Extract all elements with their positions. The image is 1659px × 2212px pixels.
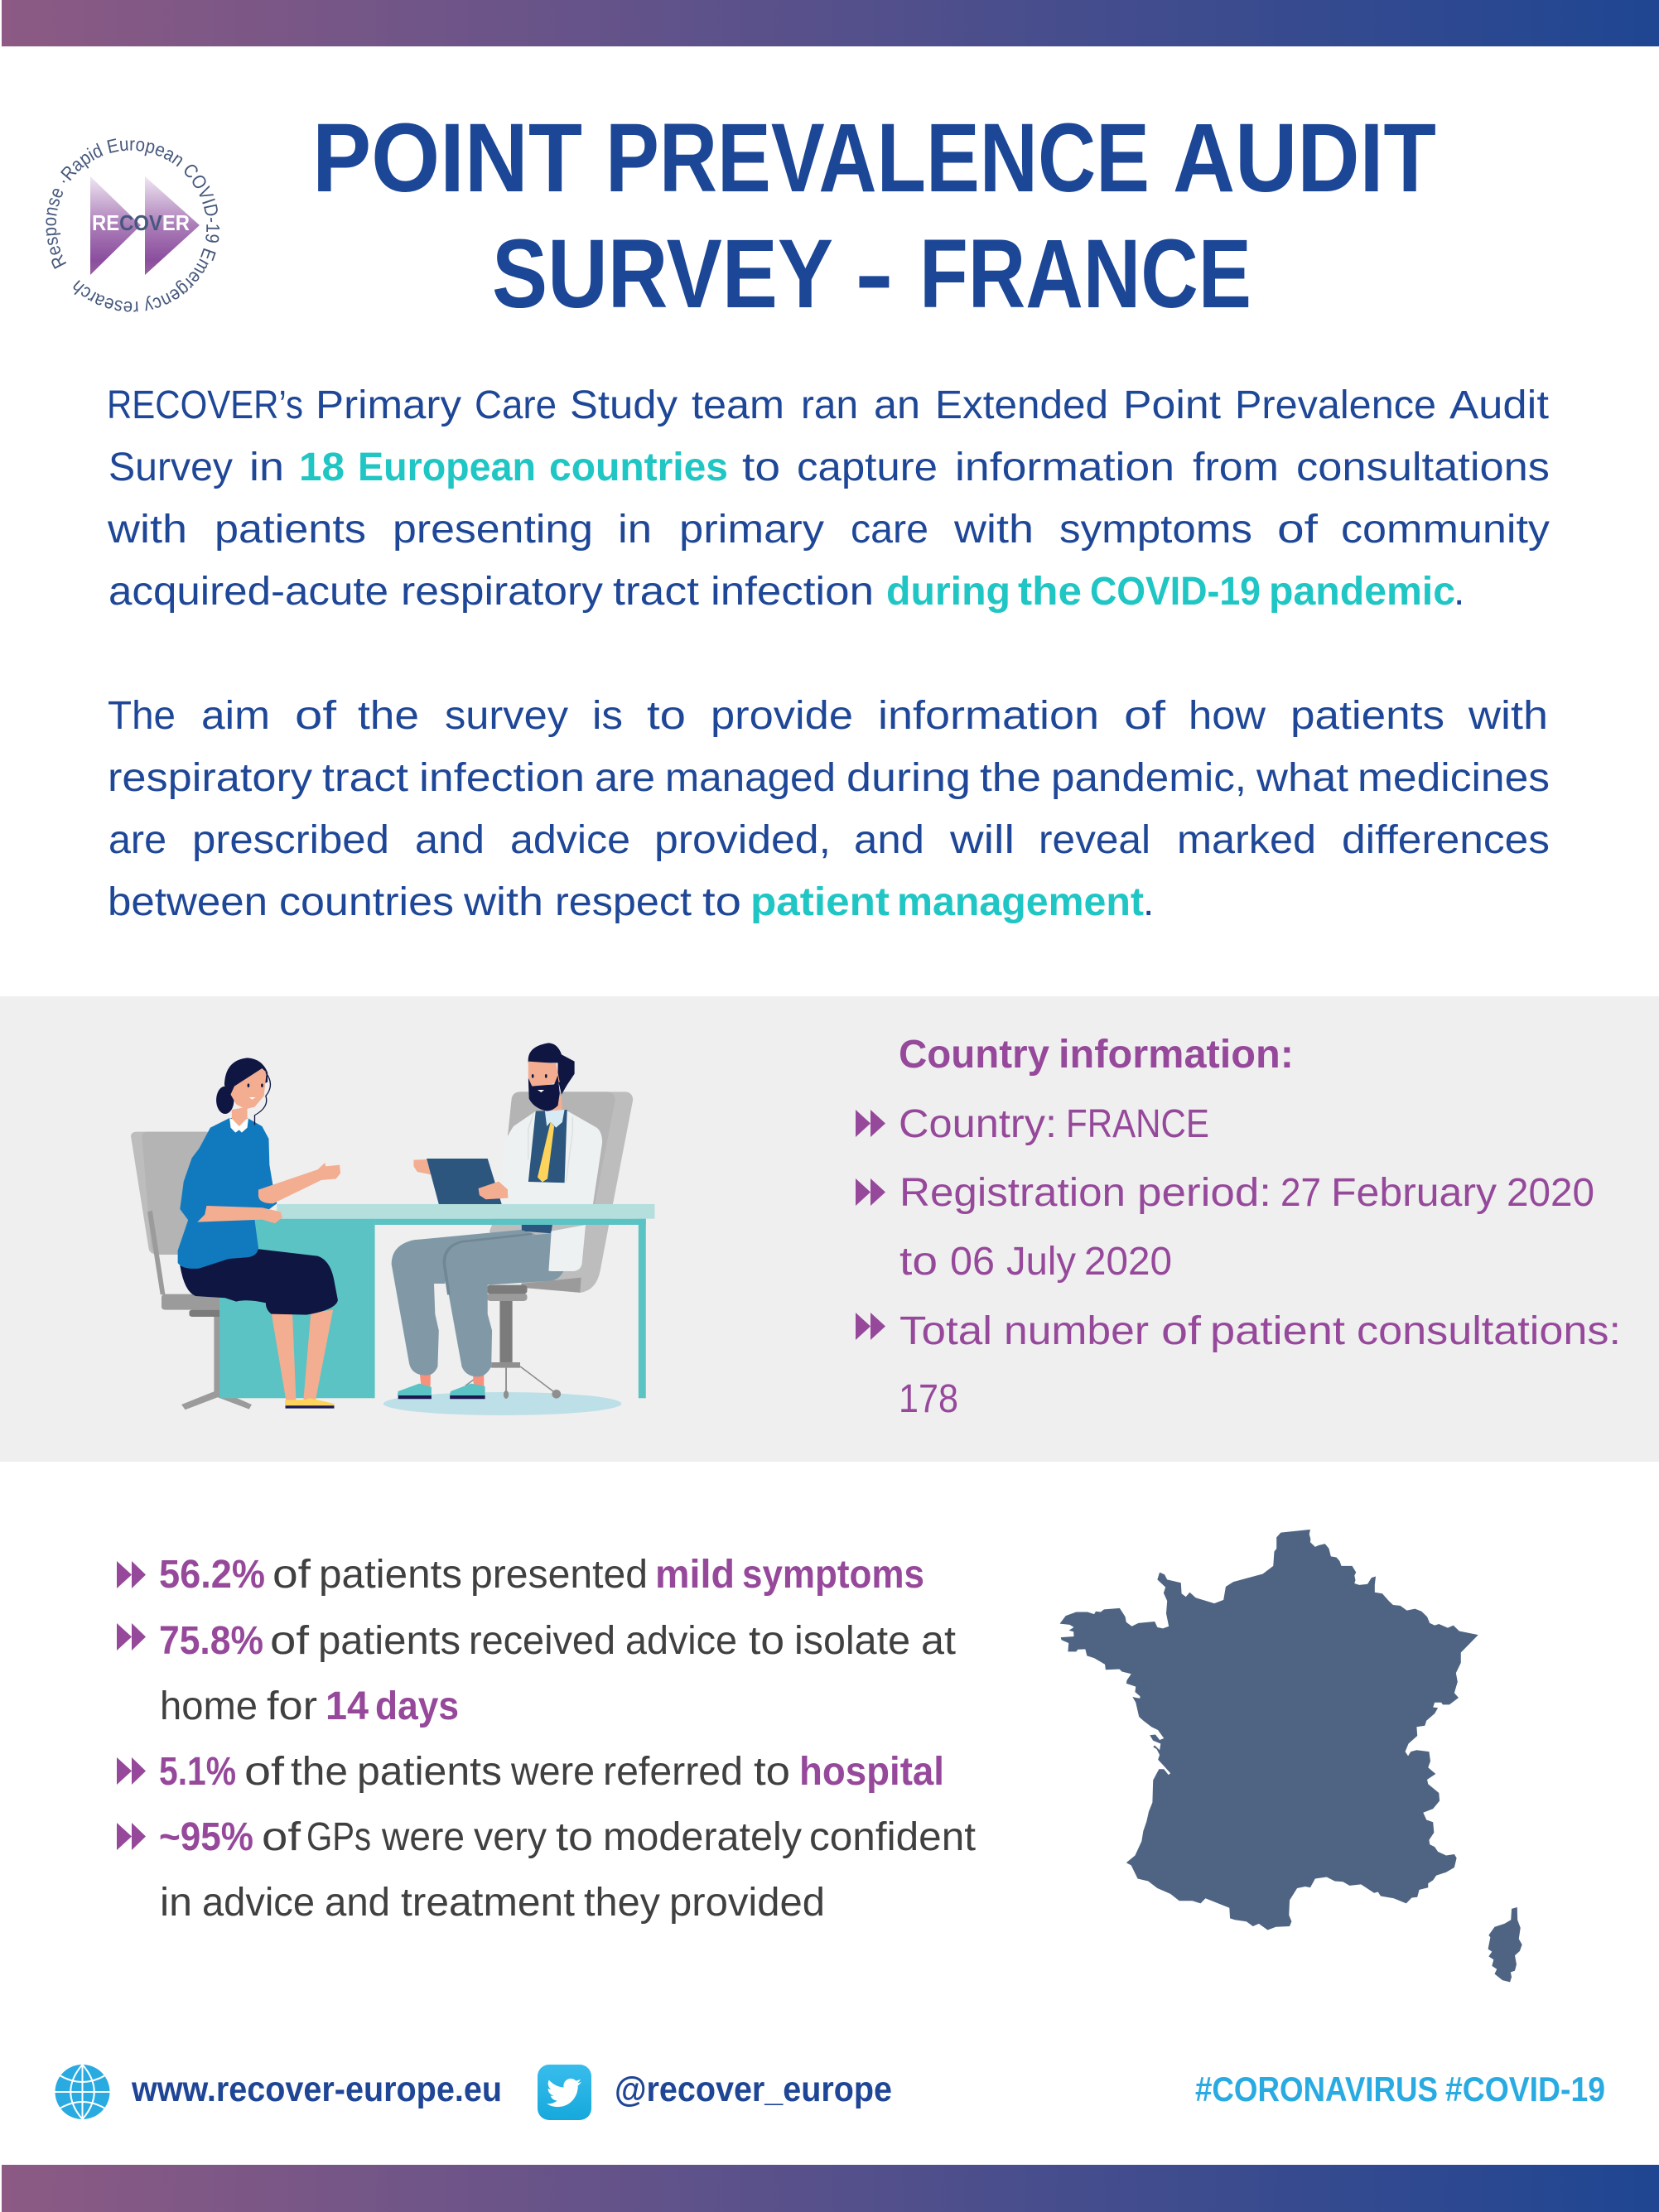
text block: survey aim: with <box>463 880 543 924</box>
finding: isolate at home: for <box>267 1684 317 1728</box>
finding: isolate at home: received <box>469 1619 615 1663</box>
finding: GP confidence: they <box>584 1881 660 1925</box>
list item: registration period: to <box>899 1240 938 1284</box>
finding: mild symptoms: of <box>272 1553 311 1597</box>
finding: GP confidence: provided <box>669 1881 825 1925</box>
list item: total consultations: Total <box>899 1309 992 1353</box>
text block: study introduction: in <box>618 508 652 552</box>
text block: survey aim: survey <box>445 694 568 738</box>
text block: study introduction: countries <box>549 446 728 489</box>
text block: study introduction: Primary <box>316 383 461 427</box>
text block: survey aim: management <box>897 880 1144 924</box>
finding: GP confidence: advice <box>202 1881 315 1925</box>
list item: registration period: 06 <box>950 1240 995 1284</box>
finding: GP confidence: in <box>160 1881 192 1925</box>
finding: isolate at home: days <box>375 1684 459 1728</box>
text block: survey aim: aim <box>201 694 270 738</box>
finding: GP confidence: of <box>262 1815 301 1859</box>
hashtags <box>1195 2070 1605 2108</box>
finding: isolate at home: isolate <box>794 1619 910 1663</box>
text block: survey aim: and <box>854 818 924 862</box>
list item: total consultations: 178 <box>899 1377 958 1421</box>
list item: country: FRANCE <box>1066 1102 1209 1146</box>
text block: study introduction: of <box>1277 508 1319 552</box>
text block: survey aim: provided, <box>654 818 831 862</box>
desk <box>219 1219 646 1398</box>
text block: study introduction: Point <box>1123 383 1221 427</box>
text block: survey aim: the <box>358 694 419 738</box>
text block: study introduction: presenting <box>393 508 593 552</box>
text block: study introduction <box>107 383 1550 614</box>
title: FRANCE <box>919 219 1251 329</box>
list item: registration period: 2020 <box>1084 1240 1172 1284</box>
text block: study introduction: symptoms <box>1059 508 1252 552</box>
title: PREVALENCE <box>605 104 1150 213</box>
list item: total consultations: consultations: <box>1357 1309 1621 1353</box>
text block: study introduction: from <box>1193 446 1279 489</box>
text block: survey aim: prescribed <box>192 818 389 862</box>
website link: www.recover-europe.eu <box>131 2070 502 2109</box>
finding: GP confidence: to <box>556 1815 593 1859</box>
finding: GP confidence: moderately <box>603 1815 802 1859</box>
text block: study introduction: tract <box>613 570 699 614</box>
finding: referred to hospital: were <box>510 1750 595 1794</box>
text block: study introduction: an <box>874 383 920 427</box>
text block: survey aim: tract <box>322 756 408 800</box>
finding: referred to hospital <box>117 1750 944 1794</box>
finding: isolate at home <box>117 1619 956 1728</box>
finding: referred to hospital: to <box>754 1750 790 1794</box>
text block: study introduction: care <box>851 508 928 552</box>
text block: survey aim: with <box>1468 694 1548 738</box>
list item: registration period: 2020 <box>1507 1171 1594 1215</box>
text block: survey aim: the <box>980 756 1041 800</box>
finding: mild symptoms <box>117 1553 924 1597</box>
text block: survey aim: is <box>592 694 623 738</box>
text block: study introduction: primary <box>679 508 824 552</box>
woman <box>178 1058 340 1409</box>
text block: study introduction: Audit <box>1449 383 1549 427</box>
text block: survey aim: advice <box>510 818 630 862</box>
desk top <box>277 1204 654 1219</box>
list item: total consultations: number <box>1004 1309 1149 1353</box>
finding: mild symptoms: patients <box>319 1553 462 1597</box>
finding: mild symptoms: presented <box>470 1553 648 1597</box>
text block: survey aim: managed <box>665 756 836 800</box>
text block: survey aim: marked <box>1177 818 1316 862</box>
text block: survey aim: pandemic, <box>1051 756 1247 800</box>
logo: RECOVER: Response ·Rapid European COVID-19 Emergency research <box>46 138 220 312</box>
text block: study introduction: European <box>358 446 536 489</box>
text block: study introduction: . <box>1454 570 1464 614</box>
list item: registration period <box>856 1171 1594 1284</box>
finding: isolate at home: advice <box>625 1619 737 1663</box>
hashtags: #CORONAVIRUS <box>1195 2070 1438 2108</box>
title: AUDIT <box>1173 104 1436 213</box>
finding: GP confidence <box>117 1815 976 1925</box>
finding: isolate at home: to <box>749 1619 784 1663</box>
text block: study introduction: patients <box>215 508 366 552</box>
logo: RECOVER: RECOVER <box>92 210 190 235</box>
heading: country information <box>899 1033 1294 1077</box>
finding: GP confidence: and <box>325 1881 390 1925</box>
text block: survey aim: infection <box>419 756 585 800</box>
finding: isolate at home: home <box>160 1684 258 1728</box>
text block: study introduction: Study <box>570 383 678 427</box>
icon: twitter <box>538 2065 591 2120</box>
finding: mild symptoms: 56.2% <box>159 1553 265 1597</box>
title: POINT <box>312 104 582 213</box>
text block: survey aim: how <box>1189 694 1266 738</box>
text block: study introduction: capture <box>797 446 938 489</box>
text block: study introduction: pandemic <box>1269 570 1455 614</box>
text block: study introduction: to <box>742 446 780 489</box>
key findings list <box>117 1553 976 1925</box>
list item: total consultations <box>856 1309 1621 1421</box>
text block: study introduction: infection <box>711 570 874 614</box>
finding: GP confidence: confident <box>809 1815 976 1859</box>
text block: study introduction: information <box>955 446 1174 489</box>
text block: survey aim: . <box>1143 880 1154 924</box>
text block: study introduction: respiratory <box>401 570 603 614</box>
finding: referred to hospital: the <box>291 1750 348 1794</box>
text block: study introduction: Care <box>475 383 557 427</box>
list item: total consultations: patient <box>1210 1309 1345 1353</box>
text block: survey aim: of <box>1124 694 1166 738</box>
text block: study introduction: with <box>107 508 187 552</box>
text block: survey aim: medicines <box>1358 756 1550 800</box>
text block: survey aim: patient <box>750 880 890 924</box>
finding: referred to hospital: hospital <box>799 1750 944 1794</box>
finding: GP confidence: ~95% <box>159 1815 253 1859</box>
finding: mild symptoms: symptoms <box>742 1553 924 1597</box>
heading: country information: Country <box>899 1033 1049 1077</box>
heading: country information: information: <box>1059 1033 1294 1077</box>
text block: survey aim: to <box>647 694 686 738</box>
finding: GP confidence: were <box>381 1815 465 1859</box>
text block: survey aim: patients <box>1290 694 1444 738</box>
text block: study introduction: in <box>249 446 284 489</box>
text block: survey aim: between <box>108 880 268 924</box>
text block: study introduction: Survey <box>109 446 233 489</box>
illustration: patient and doctor at a desk <box>131 1043 654 1415</box>
text block: study introduction: 18 <box>299 446 345 489</box>
finding: GP confidence: treatment <box>401 1881 575 1925</box>
icon: globe <box>55 2065 109 2119</box>
list item: registration period: Registration <box>899 1171 1126 1215</box>
bottom gradient bar <box>2 2165 1659 2212</box>
text block: study introduction: the <box>1018 570 1082 614</box>
title: SURVEY <box>492 219 833 329</box>
finding: GP confidence: very <box>474 1815 547 1859</box>
text block: survey aim: countries <box>279 880 454 924</box>
text block: study introduction: team <box>692 383 784 427</box>
woman's chair <box>131 1132 269 1410</box>
finding: isolate at home: of <box>270 1619 310 1663</box>
list item: country: Country: <box>899 1102 1057 1146</box>
list item: registration period: period: <box>1137 1171 1271 1215</box>
text block: survey aim: will <box>949 818 1015 862</box>
text block: survey aim: of <box>295 694 337 738</box>
text block: survey aim: The <box>108 694 176 738</box>
text block: study introduction: during <box>886 570 1010 614</box>
finding: referred to hospital: referred <box>603 1750 743 1794</box>
text block: survey aim: provide <box>711 694 853 738</box>
list item: total consultations: of <box>1161 1309 1202 1353</box>
list item: registration period: February <box>1331 1171 1497 1215</box>
text block: survey aim: respiratory <box>108 756 312 800</box>
list item: registration period: July <box>1006 1240 1076 1284</box>
text block: study introduction: Extended <box>935 383 1108 427</box>
list item: country <box>856 1102 1209 1146</box>
text block: survey aim <box>108 694 1550 924</box>
text block: survey aim: are <box>109 818 166 862</box>
finding: referred to hospital: patients <box>357 1750 502 1794</box>
text block: survey aim: what <box>1256 756 1348 800</box>
map of France <box>1060 1530 1522 1982</box>
text block: survey aim: reveal <box>1039 818 1150 862</box>
finding: isolate at home: 75.8% <box>159 1619 263 1663</box>
text block: survey aim: are <box>595 756 655 800</box>
panel: country information <box>0 996 1659 1462</box>
hashtags: #COVID-19 <box>1445 2070 1605 2108</box>
doctor <box>392 1043 602 1399</box>
top gradient bar <box>2 0 1659 46</box>
finding: GP confidence: GPs <box>306 1815 371 1859</box>
finding: isolate at home: at <box>921 1619 956 1663</box>
text block: study introduction: RECOVER’s <box>107 383 303 427</box>
list item: registration period: 27 <box>1280 1171 1321 1215</box>
title: - <box>855 219 894 329</box>
finding: mild symptoms: mild <box>655 1553 735 1597</box>
text block: survey aim: information <box>878 694 1099 738</box>
text block: study introduction: community <box>1341 508 1550 552</box>
text block: survey aim: differences <box>1342 818 1550 862</box>
finding: referred to hospital: 5.1% <box>159 1750 236 1794</box>
text block: study introduction: acquired-acute <box>109 570 388 614</box>
finding: referred to hospital: of <box>244 1750 285 1794</box>
text block: study introduction: consultations <box>1296 446 1550 489</box>
text block: study introduction: with <box>953 508 1034 552</box>
text block: study introduction: ran <box>801 383 858 427</box>
title <box>312 104 1436 329</box>
text block: survey aim: and <box>415 818 485 862</box>
doctor's chair <box>383 1092 633 1415</box>
text block: survey aim: during <box>846 756 971 800</box>
twitter handle: @recover_europe <box>615 2070 892 2109</box>
text block: survey aim: to <box>702 880 741 924</box>
text block: survey aim: respect <box>555 880 692 924</box>
finding: isolate at home: 14 <box>326 1684 369 1728</box>
text block: study introduction: COVID-19 <box>1090 570 1261 614</box>
finding: isolate at home: patients <box>318 1619 461 1663</box>
text block: study introduction: Prevalence <box>1235 383 1436 427</box>
